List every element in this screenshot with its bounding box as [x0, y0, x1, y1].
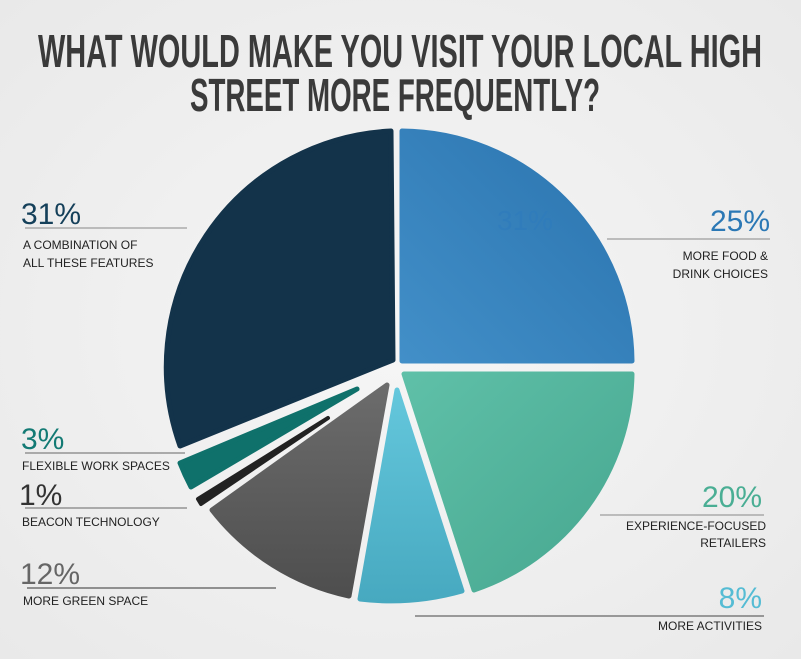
slice: 25% food and drink — [402, 131, 632, 361]
label: 1% beacon: BEACON TECHNOLOGY — [22, 515, 160, 529]
slice: 20% experience-focused — [404, 374, 632, 590]
label: 3% flexible: FLEXIBLE WORK SPACES — [22, 459, 170, 473]
label: 31% combination: A COMBINATION OF — [23, 238, 137, 252]
pie chart — [166, 131, 632, 601]
label: 25% food: MORE FOOD & — [683, 249, 768, 263]
slice: 31% combination — [166, 131, 393, 446]
label: 25% food: 25% — [710, 205, 770, 238]
label: 3% flexible: 3% — [21, 423, 64, 456]
label: 12% green space: MORE GREEN SPACE — [23, 594, 148, 608]
label: 1% beacon — [19, 479, 187, 529]
label: 20% experience: 20% — [702, 481, 762, 514]
title — [38, 25, 762, 121]
label: 25% food: DRINK CHOICES — [673, 267, 768, 281]
label: 8% activities: MORE ACTIVITIES — [658, 619, 762, 633]
slice: 12% green space — [212, 385, 387, 596]
label: 8% activities — [415, 582, 764, 633]
label: 12% green space: 12% — [20, 558, 80, 591]
label: 20% experience — [600, 481, 766, 550]
label: 8% activities: 8% — [719, 582, 762, 615]
label: 20% experience: RETAILERS — [700, 536, 766, 550]
label: 31% combination: ALL THESE FEATURES — [23, 256, 153, 270]
label: 12% green space — [20, 558, 276, 608]
label: 25% food — [607, 205, 770, 281]
label: 31% combination — [21, 198, 187, 270]
slice: 1% beacon — [198, 418, 328, 504]
hidden label 31%: 31% — [497, 205, 553, 236]
label: 3% flexible — [21, 423, 185, 473]
slice: 3% flexible — [180, 389, 357, 487]
slice: 8% activities — [360, 390, 462, 601]
label: 1% beacon: 1% — [19, 479, 62, 512]
label: 20% experience: EXPERIENCE-FOCUSED — [626, 519, 766, 533]
label: 31% combination: 31% — [21, 198, 81, 231]
